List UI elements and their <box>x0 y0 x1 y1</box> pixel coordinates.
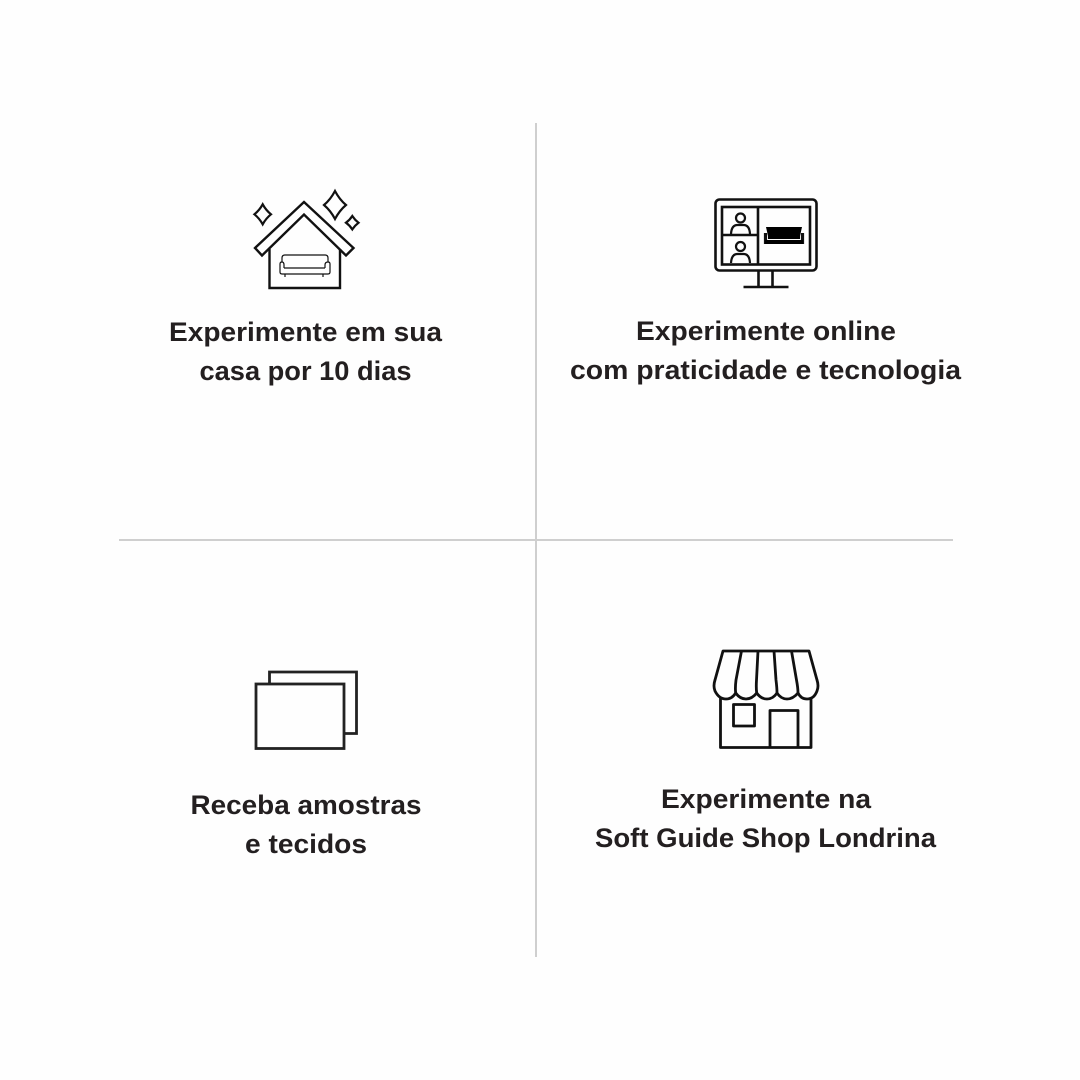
panel: receive samples <box>190 672 422 859</box>
heading: try at home: Experimente em sua <box>169 317 443 347</box>
heading: try at home <box>169 317 443 386</box>
panel: try at home <box>169 191 443 386</box>
heading: receive samples <box>190 790 422 859</box>
heading: try online <box>570 316 962 385</box>
heading: try in shop: Soft Guide Shop Londrina <box>595 823 937 853</box>
panel: try in shop <box>595 651 937 853</box>
icon: storefront <box>714 651 818 748</box>
icon: fabric samples <box>256 672 356 748</box>
icon: monitor with video call <box>716 200 816 287</box>
heading: receive samples: e tecidos <box>245 829 367 859</box>
heading: try online: Experimente online <box>636 316 896 346</box>
panel: try online <box>570 200 962 385</box>
heading: try online: com praticidade e tecnologia <box>570 355 962 385</box>
heading: try in shop: Experimente na <box>661 784 872 814</box>
heading: receive samples: Receba amostras <box>190 790 422 820</box>
icon: house with sofa and sparkles <box>254 191 358 288</box>
heading: try in shop <box>595 784 937 853</box>
heading: try at home: casa por 10 dias <box>200 356 412 386</box>
